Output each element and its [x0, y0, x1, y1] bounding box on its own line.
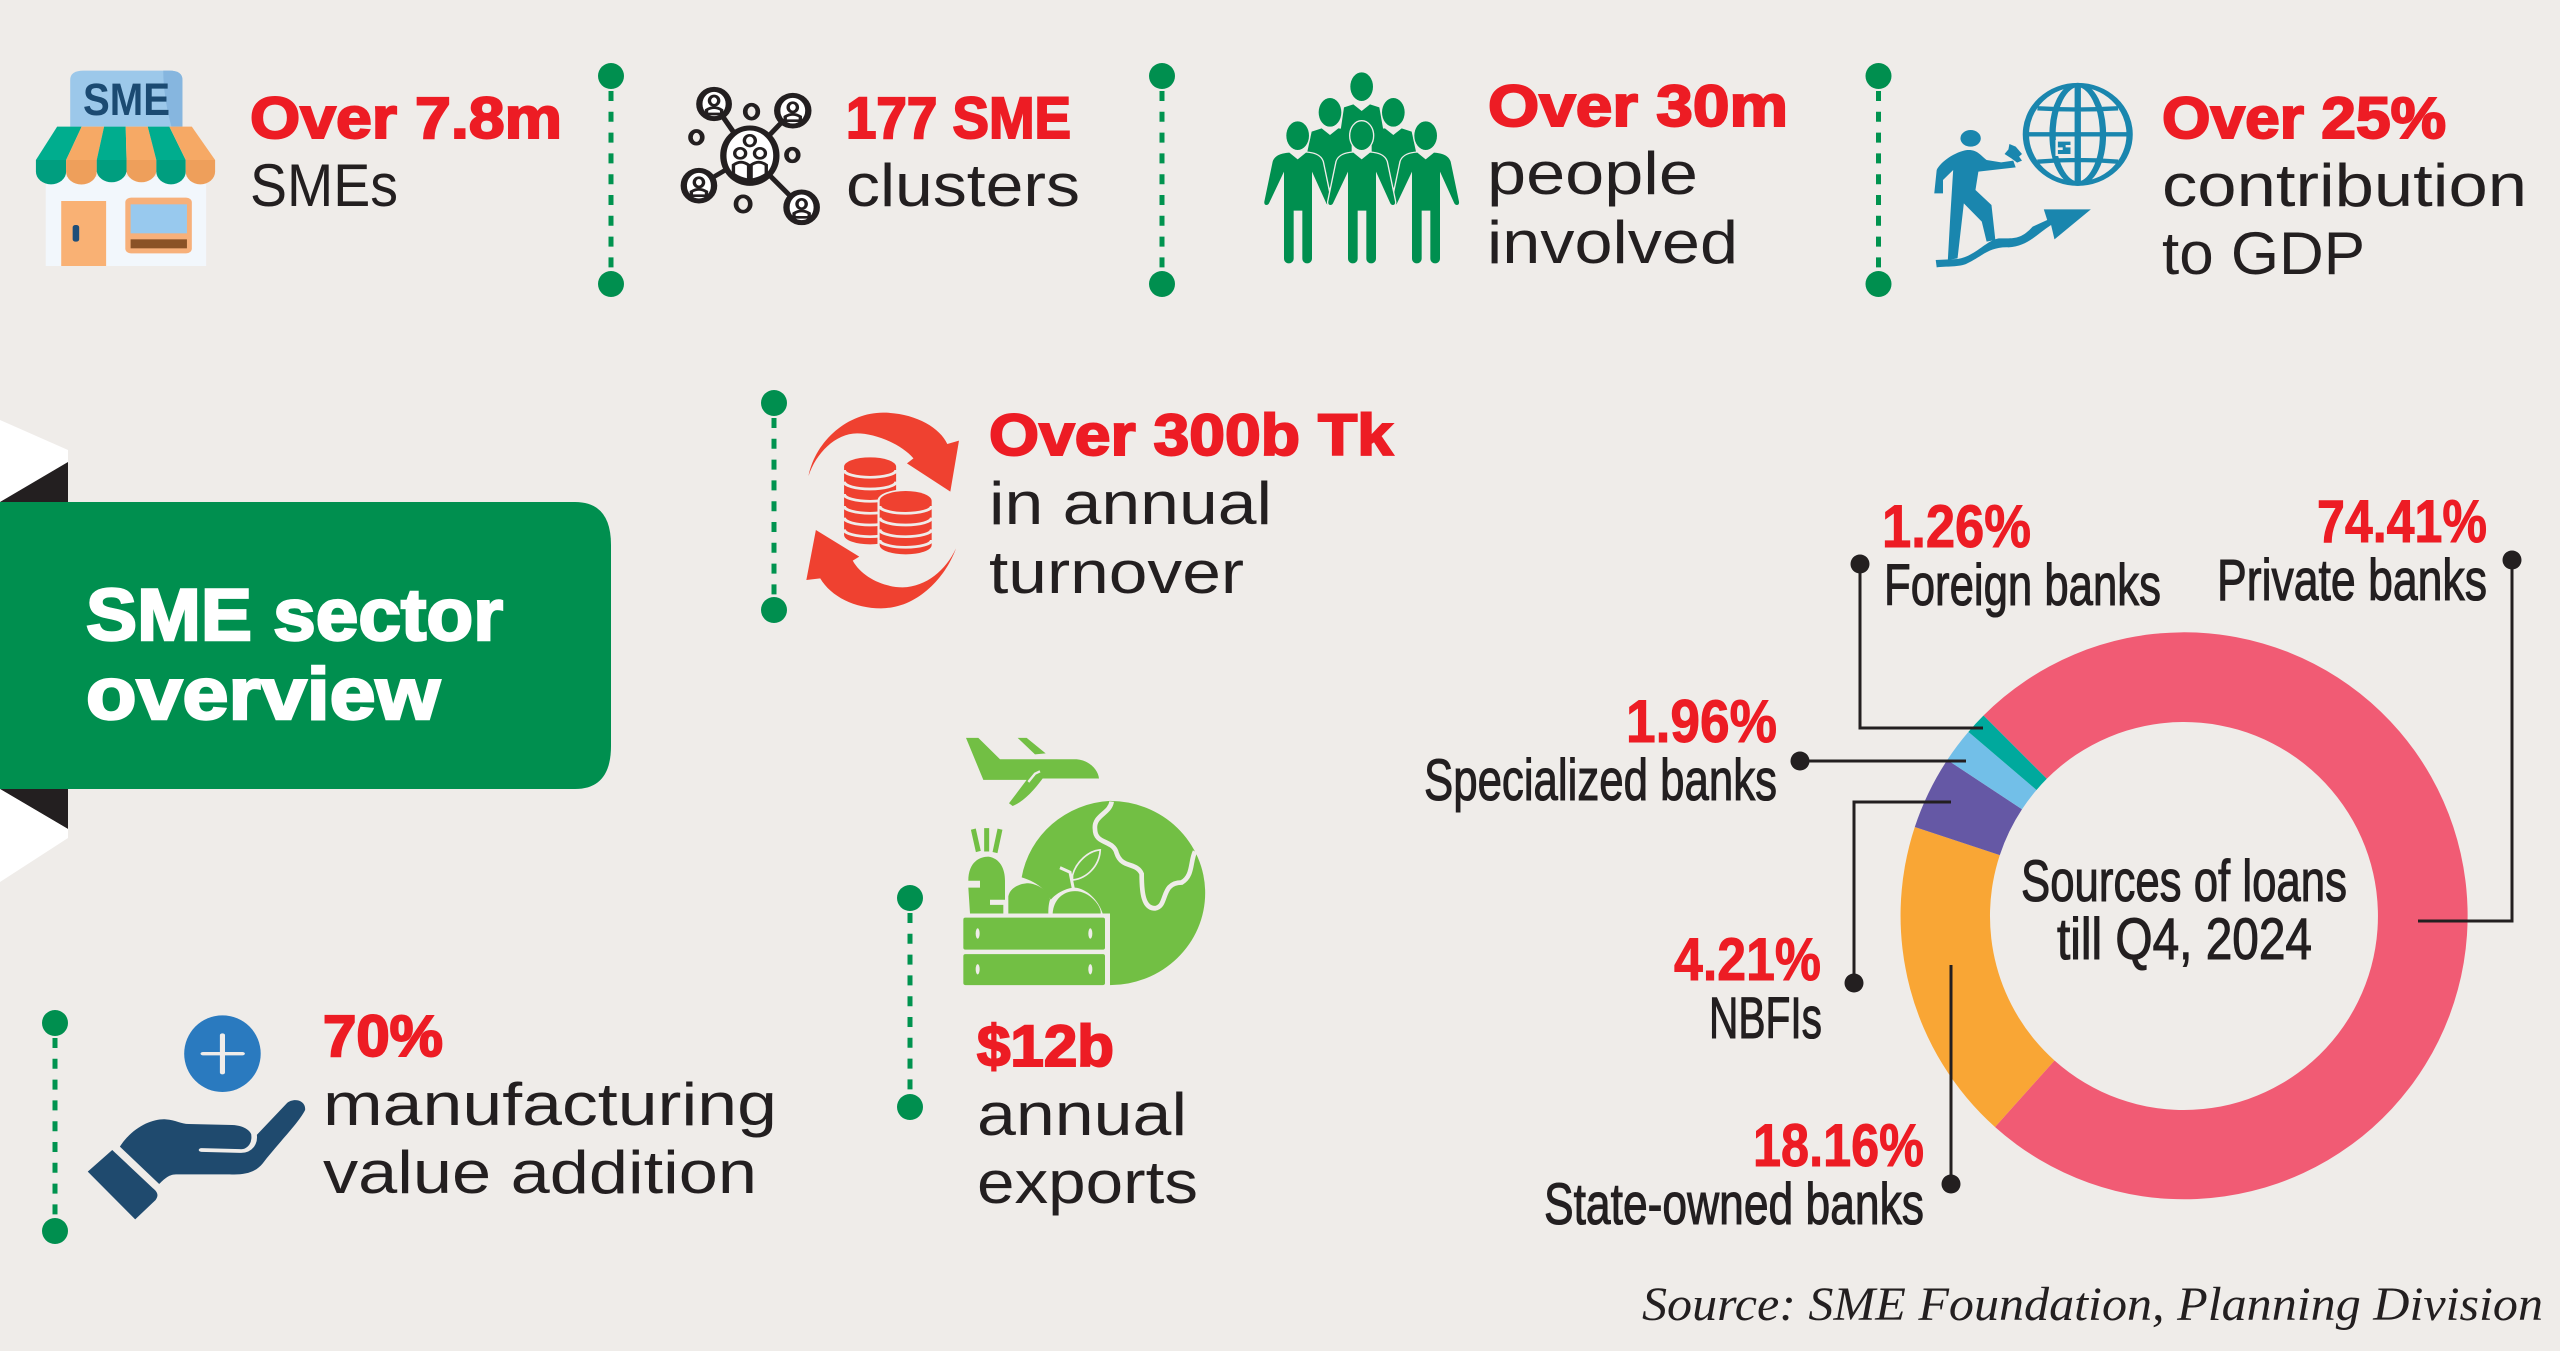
label: manufacturing value addition: [323, 1071, 777, 1206]
segment: foreign banks 1.26%: [1968, 716, 2047, 790]
callout: private banks: Private banks: [2217, 548, 2487, 613]
figure: Over 30m: Over 30m: [1488, 74, 1788, 139]
stat: Over 25% contribution to GDP: [1934, 85, 2527, 287]
callout: private banks: 74.41%: [2317, 488, 2487, 555]
divider: dotted line 2: [1149, 63, 1175, 297]
icon: plane, globe and produce crate: [963, 738, 1205, 985]
callout: specialized banks: [1424, 688, 1966, 813]
callout: private banks: [2217, 488, 2522, 921]
title banner: [0, 420, 611, 882]
figure: Over 25%: Over 25%: [2162, 86, 2446, 151]
callout: state-owned banks: 18.16%: [1753, 1112, 1924, 1179]
label: in annual turnover: in annual: [989, 470, 1272, 537]
stat: $12b annual exports: [963, 738, 1205, 1216]
figure: Over 7.8m: Over 7.8m: [250, 86, 562, 151]
label: contribution to GDP: to GDP: [2162, 220, 2365, 287]
callout: specialized banks: 1.96%: [1626, 688, 1777, 755]
label: people involved: people: [1487, 140, 1698, 207]
title text: overview: [86, 654, 440, 735]
icon: coins with circular arrows: [806, 413, 959, 608]
label: contribution to GDP: contribution: [2162, 152, 2527, 219]
divider: dotted line 1: [598, 63, 624, 297]
label: annual exports: exports: [977, 1149, 1198, 1216]
label: annual exports: [977, 1081, 1198, 1216]
figure: 177 SME: 177 SME: [846, 86, 1071, 151]
title text: [86, 575, 503, 735]
donut chart: sources of loans: [1901, 632, 2468, 1199]
segment: specialized banks 1.96%: [1947, 732, 2036, 809]
label: people involved: involved: [1487, 209, 1738, 276]
centre label: [2021, 849, 2347, 972]
icon: person climbing toward globe: [1934, 85, 2130, 267]
segment: NBFIs 4.21%: [1915, 760, 2022, 855]
icon: SME shop: [36, 71, 215, 266]
label: manufacturing value addition: manufacturing: [323, 1071, 777, 1138]
green panel: [0, 502, 611, 789]
label: in annual turnover: [989, 470, 1272, 606]
source note: Source: SME Foundation, Planning Division: [1642, 1278, 2543, 1331]
label: manufacturing value addition: value addition: [323, 1139, 757, 1206]
figure: $12b: $12b: [977, 1014, 1114, 1079]
callout: specialized banks: Specialized banks: [1424, 748, 1777, 813]
divider: turnover dotted line: [761, 390, 787, 623]
callout: NBFIs: NBFIs: [1709, 986, 1822, 1051]
divider: dotted line 3: [1866, 63, 1892, 297]
stat: Over 300b Tk in annual turnover: [806, 403, 1394, 608]
callout: NBFIs: 4.21%: [1674, 926, 1821, 993]
icon: hand with plus: [88, 1015, 305, 1219]
segment: private banks 74.41%: [1984, 632, 2468, 1199]
label: clusters: clusters: [846, 152, 1080, 219]
title text: SME sector: [86, 575, 503, 656]
label: people involved: [1487, 140, 1738, 276]
segment: state-owned banks 18.16%: [1901, 827, 2054, 1127]
centre label: till Q4, 2024: [2057, 907, 2312, 972]
centre label: Sources of loans: [2021, 849, 2347, 914]
figure: Over 300b Tk: Over 300b Tk: [989, 403, 1394, 468]
stat: 177 SME clusters: [684, 86, 1080, 223]
stat: 70% manufacturing value addition: [88, 1004, 777, 1219]
callout: state-owned banks: [1544, 965, 1960, 1237]
label: contribution to GDP: [2162, 152, 2527, 287]
stat: Over 7.8m SMEs: [36, 71, 562, 266]
label: annual exports: annual: [977, 1081, 1187, 1148]
stat: Over 30m people involved: [1264, 72, 1788, 276]
divider: manufacturing dotted line: [42, 1010, 68, 1244]
callout: foreign banks: Foreign banks: [1884, 553, 2161, 618]
label: in annual turnover: turnover: [989, 539, 1244, 606]
callout: NBFIs: [1674, 802, 1951, 1051]
divider: exports dotted line: [897, 885, 923, 1120]
callout: state-owned banks: State-owned banks: [1544, 1172, 1924, 1237]
icon: network cluster: [684, 89, 817, 223]
ribbon folds: [0, 420, 68, 882]
figure: 70%: 70%: [323, 1004, 443, 1069]
icon: group of people: [1264, 72, 1459, 263]
callout: foreign banks: [1850, 493, 2161, 728]
label: SMEs: SMEs: [250, 152, 398, 219]
callout: foreign banks: 1.26%: [1882, 493, 2031, 560]
icon: SME shop: SME: [83, 74, 170, 125]
